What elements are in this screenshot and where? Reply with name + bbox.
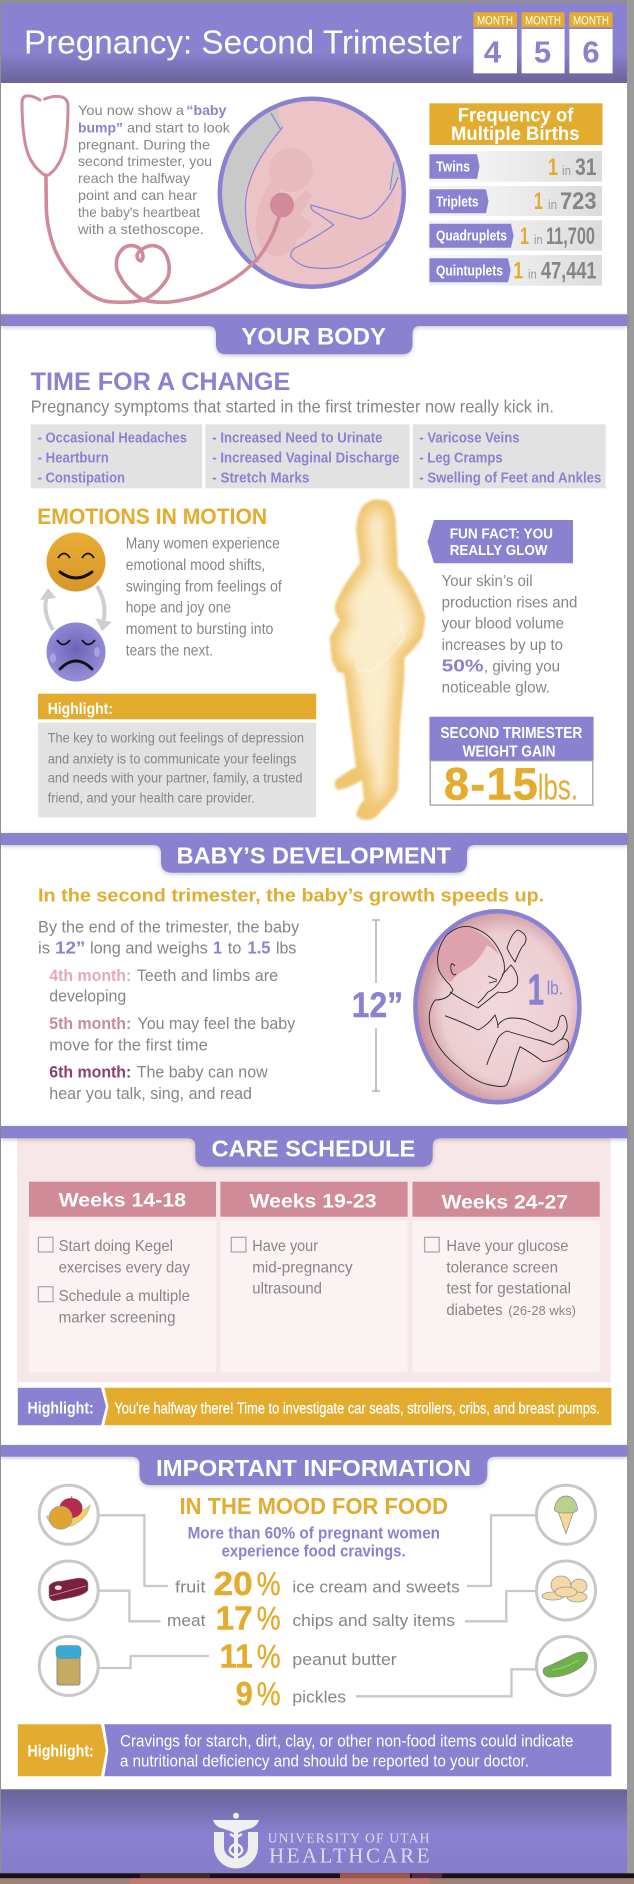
icon: mood faces — [40, 532, 112, 682]
row: quintuplets — [429, 255, 602, 286]
row: triplets: 1 — [534, 188, 543, 215]
heading: time for a change: TIME FOR A CHANGE — [31, 369, 290, 396]
row: quintuplets: Quintuplets — [436, 263, 503, 279]
weight label: 1 — [528, 965, 544, 1014]
stat: 20 percent fruit, ice cream and sweets: % — [257, 1566, 281, 1602]
text: emotions description: hope and joy one — [126, 600, 231, 617]
panel: symptom list 3: - Swelling of Feet and Ankles — [419, 470, 601, 486]
panel: weight gain: 8-15 — [444, 758, 538, 809]
callout: highlight on depression: The key to working out feelings of depression — [48, 730, 304, 746]
text: 4th month: developing — [49, 988, 126, 1006]
section banner: your body: YOUR BODY — [241, 324, 386, 350]
text: 5th month: 5th month: — [49, 1015, 131, 1033]
icon: cycle arrows — [40, 586, 112, 631]
text: cravings summary: More than 60% of pregnant women — [188, 1524, 440, 1542]
section banner: care schedule: CARE SCHEDULE — [212, 1136, 415, 1162]
text: fun fact description: your blood volume — [442, 616, 564, 633]
illustration: belly cross-section with fetus — [218, 96, 406, 289]
stat: 9 percent pickles: 9 — [236, 1675, 253, 1712]
footer — [1, 1789, 627, 1873]
icon: stethoscope forming a heart — [22, 96, 294, 302]
text: 6th month — [49, 1064, 268, 1103]
column: weeks 14-18 — [29, 1182, 216, 1372]
text: fun fact description: 50% — [442, 656, 484, 676]
month 4 badge: MONTH — [477, 15, 513, 27]
panel: care schedule — [17, 1138, 611, 1382]
text block: intro: the baby's heartbeat — [78, 204, 200, 220]
text: 4th month: 4th month: — [49, 967, 131, 985]
icon: glowing pregnant silhouette — [325, 495, 430, 825]
row: quadruplets — [429, 220, 602, 251]
row: quintuplets: 47,441 — [541, 258, 596, 285]
heading: emotions in motion: EMOTIONS IN MOTION — [37, 504, 267, 529]
section banner: care schedule — [1, 1126, 627, 1167]
icon: happy face — [46, 532, 106, 592]
column: weeks 24-27 — [412, 1182, 600, 1372]
callout: fun fact — [427, 520, 573, 563]
callout: highlight on depression: friend, and your health care provider. — [48, 790, 255, 806]
row: triplets: in — [548, 197, 557, 212]
row: quintuplets: in — [528, 267, 537, 282]
icon: sad face — [46, 622, 106, 682]
row: twins: 31 — [575, 154, 596, 181]
stat: 9 percent pickles: pickles — [292, 1688, 346, 1706]
row: quintuplets: 1 — [514, 258, 523, 285]
column: weeks 19-23: mid-pregnancy — [252, 1259, 353, 1276]
text: emotions description — [126, 535, 282, 659]
callout: fun fact: REALLY GLOW — [450, 543, 548, 559]
stat: 11 percent peanut butter: peanut butter — [292, 1651, 397, 1669]
panel: frequency of multiple births: Multiple Births — [451, 124, 580, 145]
panel: symptom list 3: - Varicose Veins — [419, 431, 520, 447]
icon: pickle — [536, 1636, 596, 1696]
row: triplets: Triplets — [436, 195, 478, 211]
month 4 badge — [474, 12, 517, 73]
text: emotions description: swinging from feelings of — [126, 578, 282, 595]
illustration: baby in womb — [415, 911, 579, 1102]
icon: chips — [536, 1561, 596, 1620]
text block: intro: “baby — [186, 102, 227, 118]
icon: meat — [39, 1561, 98, 1620]
stat: 11 percent peanut butter: % — [257, 1638, 281, 1674]
panel: symptom list 2: - Increased Vaginal Discharge — [212, 451, 400, 467]
text block: intro: bump” — [78, 119, 123, 135]
row: twins — [429, 151, 602, 182]
heading: growth speeds up: In the second trimester, the baby’s growth speeds up. — [38, 885, 544, 906]
callout: cravings highlight: Highlight: — [28, 1742, 94, 1761]
stat: 20 percent fruit, ice cream and sweets: ice cream and sweets — [292, 1578, 460, 1596]
section banner: your body — [1, 314, 627, 354]
stat: 17 percent meat, chips and salty items: chips and salty items — [292, 1612, 455, 1630]
logo wordmark: HEALTHCARE — [269, 1844, 429, 1868]
month 5 badge: 5 — [534, 35, 551, 70]
text: fun fact description: increases by up to — [442, 637, 563, 654]
weight label: lb. — [547, 978, 563, 999]
callout: halfway highlight: Highlight: — [28, 1398, 94, 1417]
logo wordmark — [268, 1830, 430, 1868]
text: 4th month — [49, 967, 278, 1006]
row: twins: 1 — [548, 154, 558, 181]
panel: symptom list 1: - Heartburn — [38, 451, 109, 467]
text: fun fact description: production rises and — [442, 594, 577, 611]
text: fun fact description: noticeable glow. — [442, 680, 550, 697]
text: baby size summary: 1.5 — [248, 938, 271, 958]
text: baby size summary: 12” — [55, 938, 85, 958]
stat: 17 percent meat, chips and salty items: % — [257, 1600, 281, 1636]
column: weeks 24-27: tolerance screen — [446, 1259, 558, 1276]
text: baby size summary: to — [228, 940, 241, 958]
column: weeks 19-23: Have your — [252, 1238, 318, 1255]
stat: 11 percent peanut butter: 11 — [220, 1637, 253, 1674]
text: cravings summary — [188, 1524, 440, 1561]
column: weeks 24-27: diabetes — [446, 1302, 503, 1319]
text block: intro: second trimester, you — [78, 153, 212, 169]
column: weeks 14-18: marker screening — [59, 1309, 176, 1326]
column: weeks 24-27: Have your glucose — [446, 1238, 569, 1255]
text: cravings summary: experience food cravings. — [222, 1543, 406, 1561]
column: weeks 24-27: (26-28 wks) — [508, 1304, 576, 1318]
text: baby size summary — [38, 918, 300, 958]
weight label — [528, 965, 563, 1014]
text: baby size summary: long and weighs — [90, 940, 208, 958]
panel: symptom list 1 — [31, 424, 202, 488]
connector lines — [98, 1515, 537, 1696]
panel: symptom list 2: - Stretch Marks — [212, 470, 309, 486]
callout: highlight on depression: Highlight: — [48, 701, 113, 718]
panel: weight gain: lbs. — [538, 766, 578, 807]
title: Pregnancy: Second Trimester — [24, 23, 462, 60]
row: triplets — [429, 186, 602, 216]
panel: symptom list 3: - Leg Cramps — [419, 451, 503, 467]
stat: 17 percent meat, chips and salty items — [167, 1599, 455, 1636]
bottom edge strip — [0, 1873, 634, 1884]
text: baby size summary: 1 — [213, 938, 222, 958]
panel: symptom list 1: - Constipation — [38, 470, 125, 486]
text: 6th month: The baby can now — [137, 1064, 268, 1082]
month 6 badge — [569, 12, 613, 73]
panel: weight gain: WEIGHT GAIN — [463, 743, 556, 760]
text: emotions description: emotional mood shifts, — [126, 557, 265, 574]
callout: highlight on depression: and anxiety is to communicate your feelings — [48, 750, 296, 766]
section banner: important information: IMPORTANT INFORMATION — [156, 1455, 471, 1481]
callout: highlight on depression — [38, 694, 316, 817]
icon: peanut butter jar — [39, 1636, 98, 1696]
logo wordmark: UNIVERSITY OF UTAH — [268, 1830, 430, 1845]
text: 4th month: Teeth and limbs are — [137, 967, 278, 985]
panel: weight gain: SECOND TRIMESTER — [440, 725, 582, 742]
panel: frequency of multiple births — [429, 103, 602, 286]
callout: highlight on depression: and needs with your partner, family, a trusted — [48, 770, 303, 786]
text: fun fact description: , giving you — [484, 659, 560, 676]
text: 5th month: move for the first time — [49, 1036, 208, 1054]
section banner: baby's development — [1, 833, 627, 873]
panel: symptom list 2: - Increased Need to Urinate — [212, 431, 383, 447]
text block: intro — [77, 102, 231, 237]
callout: cravings highlight — [18, 1724, 611, 1776]
text: emotions description: moment to bursting into — [126, 621, 274, 638]
panel: symptom list 3 — [413, 424, 606, 488]
column: weeks 14-18: Schedule a multiple — [59, 1288, 190, 1305]
text: baby size summary: lbs — [276, 940, 296, 958]
heading: in the mood for food: IN THE MOOD FOR FOOD — [180, 1493, 448, 1519]
section banner: baby's development: BABY’S DEVELOPMENT — [177, 842, 451, 868]
stat: 11 percent peanut butter — [220, 1637, 397, 1674]
text: baby size summary: is — [38, 940, 50, 958]
column: weeks 19-23: ultrasound — [252, 1281, 322, 1298]
icon: fruit — [39, 1485, 98, 1544]
column: weeks 19-23: Weeks 19-23 — [250, 1191, 376, 1212]
column: weeks 24-27: test for gestational — [446, 1281, 571, 1298]
text: emotions description: tears the next. — [126, 642, 213, 659]
row: twins: in — [562, 163, 571, 178]
text: fun fact description: Your skin’s oil — [442, 573, 533, 590]
text: 5th month: You may feel the baby — [138, 1015, 296, 1033]
stat: 9 percent pickles — [236, 1675, 346, 1712]
panel: frequency of multiple births: Frequency of — [458, 106, 574, 127]
measure: 12 inch length: 12” — [352, 986, 403, 1025]
column: weeks 14-18: exercises every day — [59, 1259, 190, 1276]
text block: intro: You now show a — [78, 102, 184, 118]
stat: 20 percent fruit, ice cream and sweets: fruit — [175, 1578, 206, 1596]
row: twins: Twins — [436, 160, 470, 176]
column: weeks 14-18: Weeks 14-18 — [59, 1191, 186, 1212]
text block: intro: and start to look — [127, 119, 231, 135]
text block: intro: pregnant. During the — [78, 136, 210, 152]
column: weeks 14-18: Start doing Kegel — [59, 1238, 173, 1255]
stat: 20 percent fruit, ice cream and sweets — [175, 1565, 460, 1602]
stat: 17 percent meat, chips and salty items: 17 — [216, 1599, 253, 1636]
text: 6th month: 6th month: — [49, 1064, 131, 1082]
icon: university logo — [213, 1813, 259, 1864]
stat: 17 percent meat, chips and salty items: meat — [167, 1612, 206, 1630]
column: weeks 19-23 — [220, 1182, 408, 1372]
stat: 20 percent fruit, ice cream and sweets: 20 — [214, 1565, 253, 1602]
text: baby size summary: By the end of the trimester, the baby — [38, 918, 300, 936]
panel: weight gain — [429, 717, 594, 809]
month 4 badge: 4 — [484, 35, 502, 70]
row: quadruplets: in — [534, 232, 543, 247]
text: 6th month: hear you talk, sing, and read — [49, 1085, 252, 1103]
text: 5th month — [49, 1015, 296, 1054]
row: triplets: 723 — [560, 188, 596, 215]
icon: ice cream — [536, 1485, 596, 1544]
callout: fun fact: FUN FACT: YOU — [450, 526, 553, 542]
stat: 9 percent pickles: % — [257, 1676, 281, 1712]
panel: symptom list 1: - Occasional Headaches — [38, 431, 187, 447]
month 6 badge: MONTH — [573, 15, 609, 27]
callout: cravings highlight: Cravings for starch, dirt, clay, or other non-food items could indicate — [120, 1732, 573, 1751]
month 5 badge — [522, 12, 565, 73]
row: quadruplets: Quadruplets — [436, 229, 507, 245]
month 6 badge: 6 — [582, 35, 600, 70]
callout: cravings highlight: a nutritional deficiency and should be reported to your doctor. — [120, 1752, 529, 1771]
row: quadruplets: 11,700 — [546, 223, 595, 250]
text block: intro: point and can hear — [78, 187, 197, 203]
text: emotions description: Many women experience — [126, 535, 280, 552]
text: symptoms intro: Pregnancy symptoms that started in the first trimester now really kick in. — [31, 397, 554, 417]
row: quadruplets: 1 — [520, 223, 529, 250]
panel: symptom list 2 — [205, 424, 410, 488]
section banner: important information — [1, 1445, 627, 1485]
callout: halfway highlight — [18, 1388, 611, 1425]
text block: intro: reach the halfway — [78, 170, 190, 186]
measure: 12 inch length — [352, 920, 403, 1091]
text block: intro: with a stethoscope. — [77, 221, 204, 237]
column: weeks 24-27: Weeks 24-27 — [442, 1192, 568, 1213]
header banner — [1, 3, 627, 83]
month 5 badge: MONTH — [525, 15, 561, 27]
text: fun fact description — [442, 573, 577, 697]
